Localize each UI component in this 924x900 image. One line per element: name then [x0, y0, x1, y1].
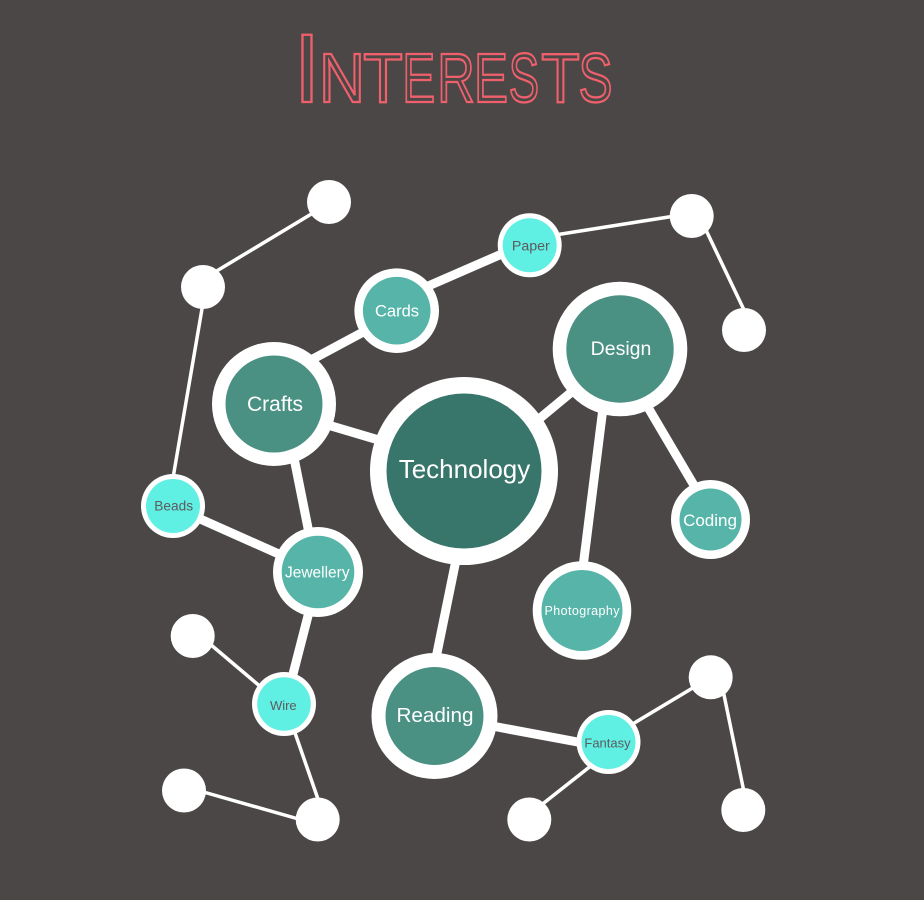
title: R [437, 39, 475, 117]
node: Cards: Cards [375, 302, 419, 320]
node: Photography: Photography [544, 604, 620, 618]
node: Wire [252, 672, 316, 736]
title: S [578, 39, 612, 117]
node: Design [553, 282, 687, 416]
node: Jewellery: Jewellery [285, 564, 350, 581]
node: Photography [533, 561, 631, 660]
title: N [319, 39, 365, 117]
node: Crafts: Crafts [247, 393, 303, 416]
node: Cards [354, 268, 439, 353]
node: Paper [498, 213, 562, 277]
node: Coding [671, 480, 750, 559]
title: I [294, 14, 320, 123]
node: Reading: Reading [396, 704, 474, 727]
node: Technology: Technology [399, 454, 530, 484]
node: Reading [372, 653, 498, 779]
node: Design: Design [591, 338, 651, 360]
node: Fantasy: Fantasy [584, 736, 631, 750]
node: Fantasy [576, 710, 640, 774]
title: T [541, 39, 580, 117]
node: Beads [141, 474, 205, 538]
title: S [509, 39, 539, 117]
title: E [402, 39, 435, 117]
node: Jewellery [273, 527, 363, 617]
node: Coding: Coding [683, 511, 737, 530]
title: T [363, 39, 403, 117]
title [294, 14, 612, 123]
node: Paper: Paper [512, 238, 550, 254]
thick connector lines [198, 253, 695, 743]
thin connector lines [173, 213, 745, 820]
node: Crafts [212, 342, 336, 466]
empty white nodes [162, 180, 766, 842]
node: Beads: Beads [154, 499, 193, 514]
title: E [474, 39, 508, 117]
node: Technology [370, 377, 558, 565]
node: Wire: Wire [270, 698, 297, 713]
